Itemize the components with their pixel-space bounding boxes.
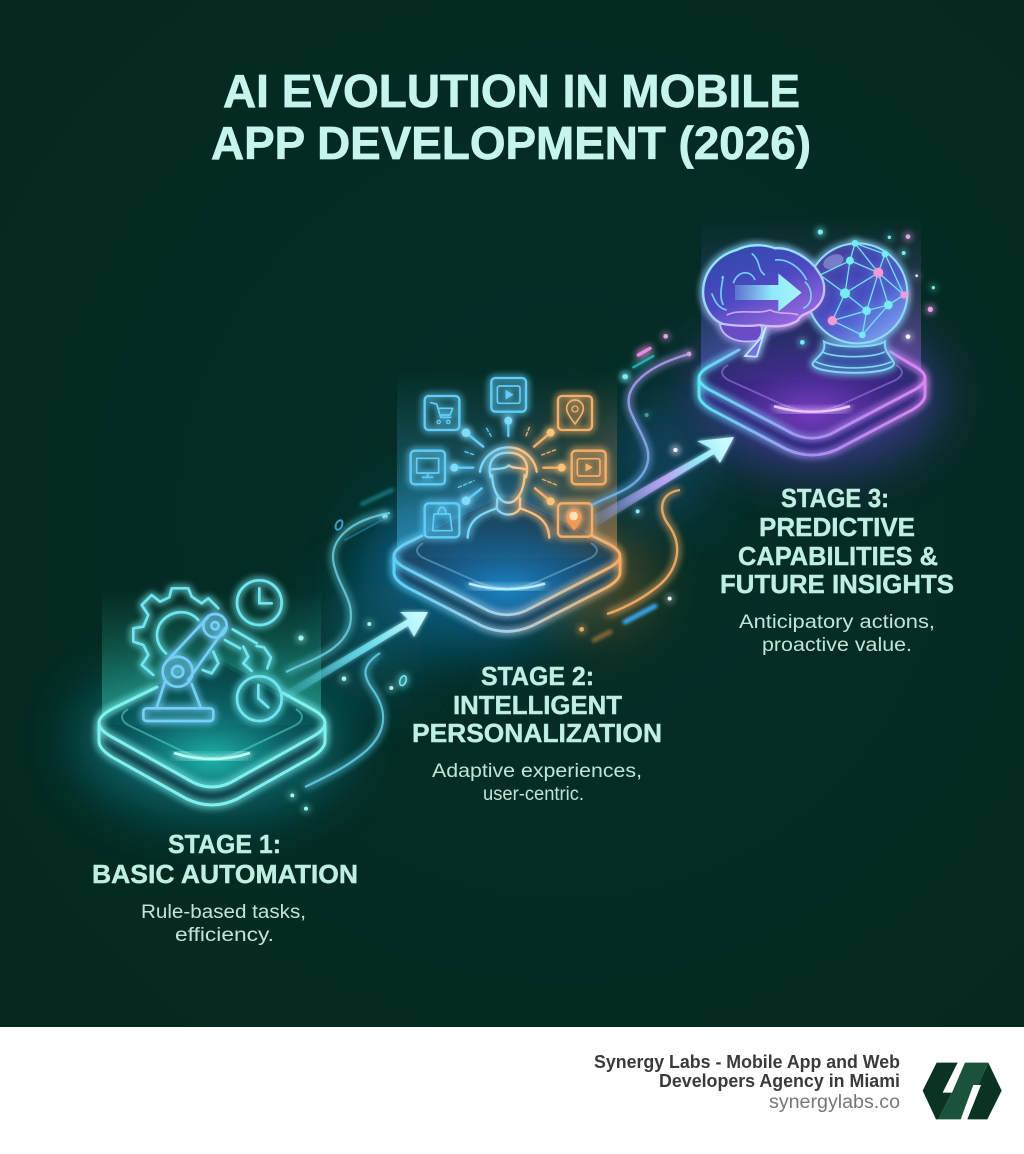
decorative sparks near stage 2 — [382, 374, 678, 632]
label: stage 1 heading: STAGE 1: — [168, 829, 281, 859]
ambient glow: connector 1 — [315, 580, 425, 700]
title: APP DEVELOPMENT (2026) — [211, 117, 811, 169]
panel: stage 3 light column — [701, 215, 921, 376]
ambient glow: stage 1 — [77, 662, 347, 818]
decorative sparks near stage 3 — [622, 229, 935, 379]
platform: stage 3 — [699, 318, 925, 455]
icon: left tiles — [411, 378, 526, 537]
connector curve: stage 1 to 2 lower — [305, 653, 383, 787]
label: stage 2 heading: PERSONALIZATION — [412, 718, 662, 748]
text: stage 1 description — [141, 902, 306, 946]
icon: right tiles — [526, 396, 606, 537]
text: stage 2 description: user-centric. — [483, 784, 584, 805]
text: stage 3 description: proactive value. — [762, 635, 912, 656]
footer bar — [0, 1027, 1024, 1154]
streaks: stage 1 connector — [334, 490, 392, 540]
streaks: stage 2 connector — [594, 606, 655, 640]
footer brand text: Synergy Labs - Mobile App and Web — [594, 1052, 900, 1072]
ambient glow: connector 2 — [610, 400, 710, 520]
arrow: stage 2 to stage 3 — [592, 437, 734, 526]
label: stage 1 heading: BASIC AUTOMATION — [92, 859, 358, 889]
icon: robot arm, gear and clocks — [133, 580, 408, 811]
icon: crystal ball stand — [813, 342, 894, 373]
footer brand text: synergylabs.co — [769, 1092, 900, 1113]
platform: stage 1 — [99, 659, 325, 805]
label: stage 3 heading: STAGE 3: — [781, 483, 889, 513]
icon: personalised user with app tiles — [382, 374, 678, 632]
title — [211, 65, 811, 169]
title: AI EVOLUTION IN MOBILE — [223, 65, 800, 117]
ambient glow: stage 2 orange — [545, 525, 655, 635]
icon: brain — [703, 245, 824, 357]
icon: user silhouette — [468, 447, 549, 538]
label: stage 1 heading — [92, 829, 358, 889]
ambient glow: stage 2 blue — [360, 490, 580, 650]
footer brand text: Developers Agency in Miami — [659, 1071, 900, 1091]
icon: Synergy Labs logo — [923, 1063, 1002, 1119]
label: stage 2 heading: INTELLIGENT — [453, 690, 622, 720]
ambient glow: stage 3 — [690, 320, 940, 470]
text: stage 3 description — [739, 612, 935, 656]
text: stage 3 description: Anticipatory actions, — [739, 612, 935, 633]
text: stage 1 description: efficiency. — [175, 925, 274, 946]
label: stage 3 heading: FUTURE INSIGHTS — [720, 569, 954, 599]
label: stage 3 heading: CAPABILITIES & — [738, 541, 938, 571]
connector curve: stage 2 to 3 upper — [592, 354, 689, 505]
label: stage 3 heading — [720, 483, 954, 599]
text: stage 2 description: Adaptive experiences, — [432, 761, 642, 782]
panel: stage 1 light column — [102, 590, 321, 721]
panel: stage 2 light column — [397, 370, 617, 553]
text: stage 1 description: Rule-based tasks, — [141, 902, 306, 923]
platform: stage 2 — [394, 497, 620, 631]
arrow: stage 1 to stage 2 — [287, 612, 428, 698]
label: stage 2 heading: STAGE 2: — [481, 661, 594, 691]
footer brand text — [594, 1052, 900, 1113]
label: stage 3 heading: PREDICTIVE — [759, 512, 915, 542]
connector curve: stage 2 to 3 lower — [607, 490, 680, 614]
text: stage 2 description — [432, 761, 642, 805]
icon: crystal ball with neural network — [622, 229, 935, 452]
connector curve: stage 1 to 2 upper — [286, 513, 390, 672]
label: stage 2 heading — [412, 661, 662, 748]
